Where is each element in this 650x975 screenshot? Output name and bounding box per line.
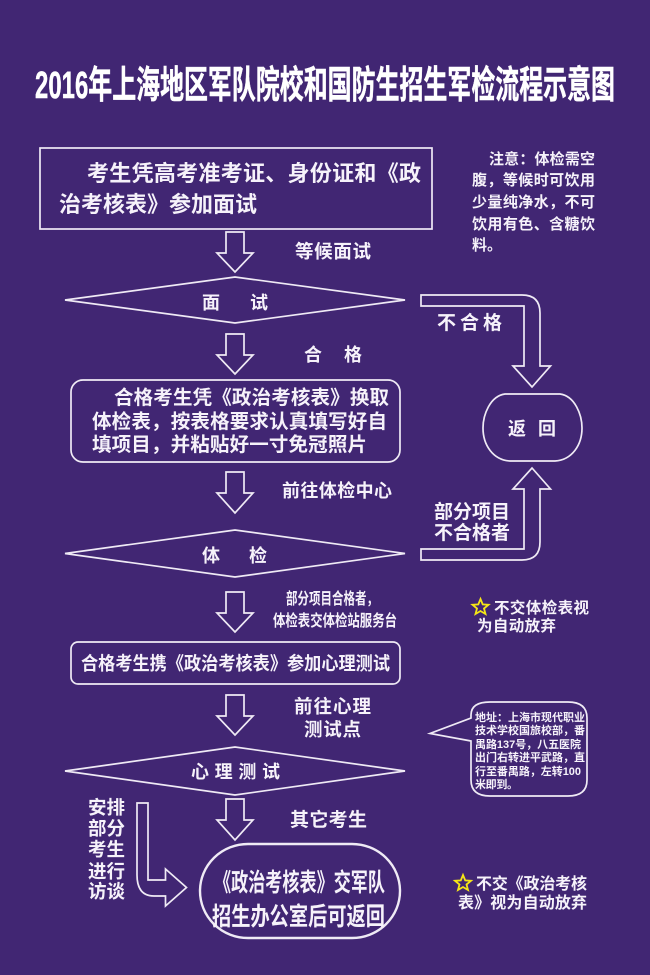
panel: final step submit form: 招生办公室后可返回 bbox=[212, 902, 385, 931]
callout: address: 米即到。 bbox=[475, 777, 518, 791]
label: other candidates: 其它考生 bbox=[290, 808, 367, 831]
arrow: down to interview bbox=[217, 232, 253, 272]
note: fasting reminder: 饮用有色、含糖饮 bbox=[472, 215, 595, 233]
label: go to medical centre: 前往体检中心 bbox=[282, 480, 392, 501]
arrow: down to psychological test step bbox=[217, 592, 253, 632]
callout: address: 地址：上海市现代职业 bbox=[475, 710, 585, 724]
decision: psychological test: 心理测试 bbox=[191, 762, 280, 782]
panel: final step submit form bbox=[200, 844, 400, 938]
icon: star bbox=[455, 875, 471, 890]
label: some items failed bbox=[434, 500, 510, 544]
arrow: down to psychological test bbox=[217, 695, 253, 735]
decision: medical exam bbox=[65, 530, 405, 577]
note: form hand-in warning: 不交体检表视 bbox=[494, 598, 589, 617]
note: form warning bbox=[455, 874, 587, 912]
arrow: down to medical centre bbox=[217, 472, 253, 513]
note: fasting reminder: 料。 bbox=[472, 236, 502, 254]
label: arrange interview: 考生 bbox=[88, 839, 125, 860]
panel: return bbox=[483, 394, 582, 461]
panel: step 2 exchange form: 填项目，并粘贴好一寸免冠照片 bbox=[92, 433, 367, 456]
label: arrange interview: 部分 bbox=[88, 818, 125, 839]
panel: step 1 interview documents: 考生凭高考准考证、身份证和《政 bbox=[87, 161, 421, 186]
label: arrange interview: 安排 bbox=[88, 797, 125, 818]
arrow: fail to return bbox=[421, 295, 550, 387]
note: fasting reminder: 少量纯净水，不可 bbox=[472, 193, 595, 211]
panel: final step submit form: 《政治考核表》交军队 bbox=[214, 869, 385, 897]
arrow: interview path bbox=[137, 803, 186, 906]
decision: medical exam: 体 检 bbox=[202, 545, 267, 566]
note: fasting reminder: 腹，等候时可饮用 bbox=[472, 171, 595, 189]
callout: address: 出门右转进平武路，直 bbox=[475, 750, 585, 764]
label: failed: 不合格 bbox=[437, 312, 502, 334]
label: partial pass hand in form bbox=[273, 589, 397, 630]
label: arrange interview: 访谈 bbox=[88, 881, 125, 902]
panel: step 2 exchange form bbox=[71, 380, 400, 462]
label: arrange interview: 进行 bbox=[88, 861, 125, 882]
panel: step 2 exchange form: 体检表，按表格要求认真填写好自 bbox=[92, 410, 387, 433]
callout: address bbox=[430, 702, 587, 796]
decision: interview: 面 试 bbox=[202, 293, 268, 313]
note: fasting reminder: 注意：体检需空 bbox=[489, 150, 595, 168]
arrow: partial fail to return bbox=[421, 468, 550, 560]
note: form warning: 不交《政治考核 bbox=[476, 874, 587, 893]
callout: address: 禺路137号，八五医院 bbox=[475, 737, 581, 751]
note: form hand-in warning: 为自动放弃 bbox=[477, 616, 556, 635]
label: waiting for interview: 等候面试 bbox=[295, 241, 371, 262]
label: go to test site: 测试点 bbox=[304, 719, 361, 740]
label: go to test site: 前往心理 bbox=[294, 696, 371, 717]
note: form hand-in warning bbox=[472, 598, 589, 635]
label: partial pass hand in form: 体检表交体检站服务台 bbox=[273, 611, 397, 630]
icon: star bbox=[472, 599, 488, 614]
panel: step 1 interview documents: 治考核表》参加面试 bbox=[59, 192, 257, 217]
label: some items failed: 不合格者 bbox=[434, 522, 510, 544]
panel: step 3 psychological test: 合格考生携《政治考核表》参加心理测试 bbox=[81, 653, 390, 674]
label: arrange interview bbox=[88, 797, 125, 902]
panel: return: 返 回 bbox=[508, 419, 556, 439]
decision: interview bbox=[65, 277, 405, 323]
callout: address: 行至番禺路，左转100 bbox=[475, 764, 581, 778]
label: partial pass hand in form: 部分项目合格者， bbox=[286, 589, 378, 608]
label: go to test site bbox=[294, 696, 371, 740]
panel: step 2 exchange form: 合格考生凭《政治考核表》换取 bbox=[114, 386, 389, 409]
label: qualified: 合 格 bbox=[304, 344, 362, 365]
panel: step 1 interview documents bbox=[40, 148, 432, 229]
arrow: down to qualified step bbox=[217, 334, 253, 374]
note: fasting reminder bbox=[472, 150, 595, 254]
label: some items failed: 部分项目 bbox=[434, 500, 510, 523]
panel: step 3 psychological test bbox=[71, 642, 400, 684]
arrow: down to final step bbox=[217, 799, 253, 840]
note: form warning: 表》视为自动放弃 bbox=[458, 893, 587, 912]
callout: address: 技术学校国旅校部，番 bbox=[475, 723, 585, 737]
decision: psychological test bbox=[65, 747, 405, 795]
